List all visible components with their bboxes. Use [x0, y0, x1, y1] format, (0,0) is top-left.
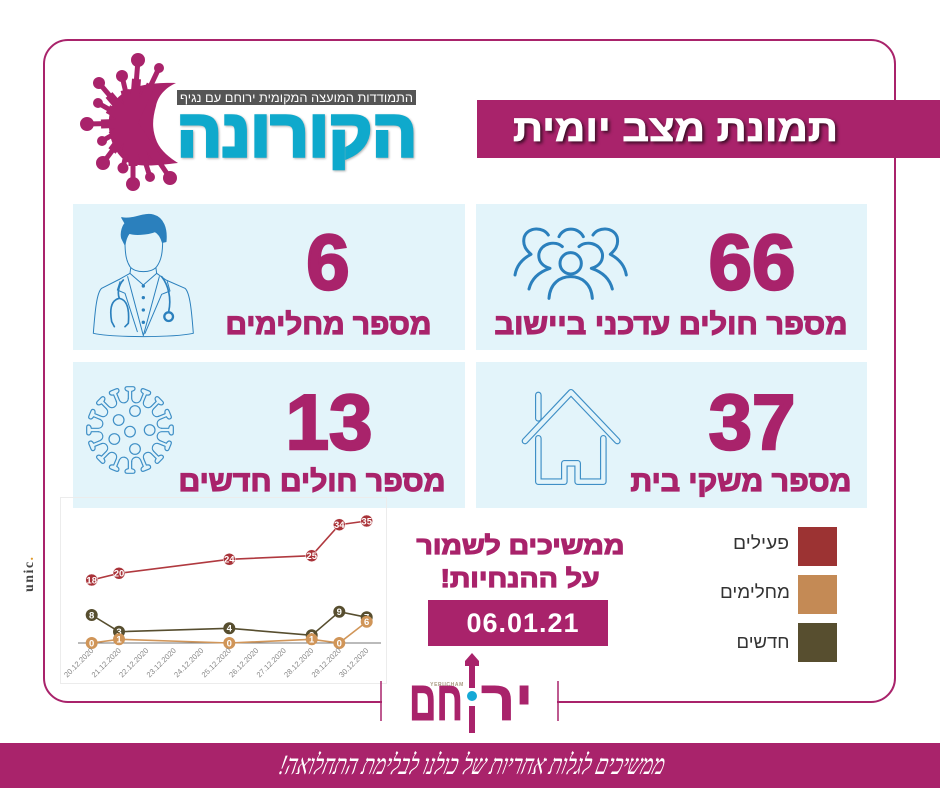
x axis dates: 30.12.2020: [337, 646, 370, 679]
number: 66: 66: [709, 218, 795, 306]
logo: Yeruham: חם: [409, 669, 463, 732]
callout: keep following guidelines: [416, 532, 624, 646]
series: active: 24: [224, 555, 235, 566]
legend: מחלימים: [720, 582, 790, 602]
series: new: 9: [337, 607, 342, 618]
series: active: [86, 515, 373, 586]
x axis dates: 23.12.2020: [145, 646, 178, 679]
series: recovered: [86, 616, 373, 649]
title banner: [477, 100, 940, 158]
series: new: 7: [364, 613, 369, 624]
series: active: 35: [361, 516, 373, 527]
x axis dates: 28.12.2020: [282, 646, 315, 679]
series: recovered: 0: [89, 638, 94, 649]
x axis dates: 22.12.2020: [117, 646, 150, 679]
x axis dates: 20.12.2020: [62, 646, 95, 679]
series: recovered: 1: [309, 635, 315, 646]
footer band: [0, 743, 940, 788]
x axis dates: 27.12.2020: [255, 646, 288, 679]
label: recovered: מספר מחלימים: [226, 309, 432, 341]
series: recovered: 6: [364, 617, 369, 628]
logo: corona: [80, 53, 417, 191]
logo: Yeruham: יר: [481, 669, 533, 732]
logo: Yeruham: [381, 653, 558, 733]
panel: current patients: [476, 204, 867, 350]
series: active: 20: [114, 569, 124, 580]
icon: house: [525, 392, 617, 482]
series: new: 2: [309, 631, 314, 642]
panel: home quarantine: [476, 362, 867, 508]
x axis dates: 26.12.2020: [227, 646, 260, 679]
number: 6: 6: [306, 218, 350, 306]
panel: recovered: [73, 204, 465, 350]
logo wordmark: הקורונה: [177, 96, 417, 170]
series: recovered: 1: [116, 635, 122, 646]
icon: virus: [86, 386, 174, 474]
logo subtitle bar: התמודדות המועצה המקומית ירוחם עם נגיף: [180, 91, 413, 105]
icon: virus crescent: [80, 53, 178, 191]
label: new patients: מספר חולים חדשים: [178, 466, 446, 498]
callout: keep following guidelines: על ההנחיות!: [440, 565, 600, 593]
number: 13: 13: [286, 378, 372, 466]
legend: [720, 527, 837, 662]
series: active: 18: [86, 575, 97, 586]
series: new: [86, 606, 373, 642]
series: active: 34: [334, 520, 345, 531]
rounded page frame: [44, 40, 895, 702]
x axis dates: 25.12.2020: [200, 646, 233, 679]
icon: arrow: [465, 653, 479, 733]
label: households: מספר משקי בית: [630, 466, 852, 498]
x axis dates: 21.12.2020: [90, 646, 123, 679]
line chart: [60, 498, 386, 684]
series: recovered: 0: [337, 638, 342, 649]
callout: keep following guidelines: ממשיכים לשמור: [416, 532, 624, 560]
legend: פעילים: [733, 533, 789, 553]
series: new: 4: [227, 624, 233, 635]
icon: group of people: [515, 229, 626, 298]
credit: unic.: [22, 557, 37, 592]
series: new: 3: [116, 627, 122, 638]
date box: 06.01.21: [466, 608, 580, 638]
title banner: תמונת מצב יומית: [513, 108, 838, 149]
series: active: 25: [306, 551, 318, 562]
icon: doctor: [93, 214, 193, 337]
x axis dates: 29.12.2020: [310, 646, 343, 679]
number: 37: 37: [709, 378, 795, 466]
series: recovered: 0: [227, 638, 232, 649]
panel: new patients: [73, 362, 465, 508]
x axis dates: 24.12.2020: [172, 646, 205, 679]
date box: [428, 600, 608, 646]
icon: cyan dot: [467, 691, 477, 701]
logo: Yeruham: YERUCHAM: [430, 682, 464, 688]
label: current patients: מספר חולים עדכני ביישוב: [494, 309, 848, 341]
footer band: ממשיכים לגלות אחריות של כולנו לבלימת התחלואה!: [276, 750, 668, 781]
x axis dates: [62, 646, 370, 679]
legend: חדשים: [736, 632, 790, 652]
series: new: 8: [89, 610, 94, 621]
